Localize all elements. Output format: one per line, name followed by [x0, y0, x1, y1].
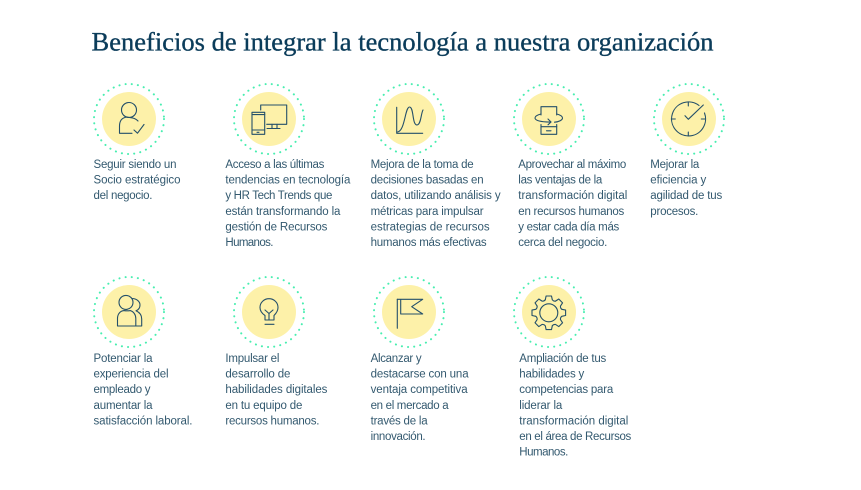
- text: benefit 6: satisfacción laboral.: [94, 415, 192, 427]
- icon: clock with check: [654, 84, 724, 154]
- text: benefit 5: procesos.: [650, 206, 698, 218]
- text: benefit 5: [650, 159, 723, 218]
- text: benefit 2: Acceso a las últimas: [225, 159, 325, 171]
- benefit 1: socio estratégico: [94, 84, 180, 202]
- benefit 5: eficiencia: [650, 84, 724, 218]
- text: benefit 6: aumentar la: [94, 400, 153, 412]
- text: benefit 9: competencias para: [519, 384, 614, 396]
- icon: light bulb: [234, 277, 304, 347]
- text: benefit 9: Humanos.: [519, 447, 568, 459]
- text: benefit 8: ventaja competitiva: [371, 384, 468, 396]
- text: benefit 7: en tu equipo de: [225, 400, 302, 412]
- text: benefit 3: métricas para impulsar: [371, 206, 484, 218]
- text: benefit 5: Mejorar la: [650, 159, 700, 171]
- text: benefit 8: en el mercado a: [371, 400, 449, 412]
- text: benefit 8: través de la: [371, 415, 428, 427]
- text: benefit 8: [371, 353, 469, 443]
- text: benefit 7: habilidades digitales: [225, 384, 328, 396]
- text: benefit 7: desarrollo de: [225, 369, 290, 381]
- text: benefit 5: agilidad de tus: [650, 190, 723, 202]
- text: benefit 1: Socio estratégico: [94, 175, 180, 187]
- icon: monitor and phone: [234, 84, 304, 154]
- text: benefit 9: habilidades y: [519, 369, 585, 381]
- benefit 6: experiencia del empleado: [94, 277, 192, 427]
- benefit 7: habilidades digitales: [225, 277, 328, 427]
- text: benefit 7: [225, 353, 328, 427]
- benefit 3: decisiones basadas en datos: [371, 84, 501, 249]
- benefit 4: transformación digital: [514, 84, 627, 249]
- text: benefit 2: y HR Tech Trends que: [225, 190, 332, 202]
- text: benefit 4: Aprovechar al máximo: [518, 159, 626, 171]
- text: benefit 4: las ventajas de la: [518, 175, 603, 187]
- text: benefit 7: Impulsar el: [225, 353, 279, 365]
- text: benefit 3: [371, 159, 501, 249]
- text: benefit 6: empleado y: [94, 384, 151, 396]
- text: benefit 3: estrategias de recursos: [371, 221, 490, 233]
- icon: line chart: [374, 84, 444, 154]
- icon: flag: [374, 277, 444, 347]
- text: benefit 3: datos, utilizando análisis y: [371, 190, 501, 202]
- text: benefit 3: decisiones basadas en: [371, 175, 484, 187]
- text: benefit 4: y estar cada día más: [518, 221, 620, 233]
- text: benefit 9: liderar la: [519, 400, 563, 412]
- text: benefit 9: [519, 353, 632, 459]
- text: benefit 8: destacarse con una: [371, 369, 469, 381]
- benefit 2: tendencias: [225, 84, 351, 249]
- text: benefit 2: [225, 159, 351, 249]
- text: benefit 1: del negocio.: [94, 190, 152, 202]
- text: benefit 4: transformación digital: [518, 190, 627, 202]
- text: benefit 8: Alcanzar y: [371, 353, 422, 365]
- text: benefit 1: [94, 159, 180, 202]
- text: benefit 9: Ampliación de tus: [519, 353, 607, 365]
- text: benefit 2: tendencias en tecnología: [225, 175, 351, 187]
- text: benefit 6: [94, 353, 192, 427]
- text: benefit 8: innovación.: [371, 431, 426, 443]
- benefit 8: ventaja competitiva: [371, 277, 469, 443]
- icon: gear: [514, 277, 584, 347]
- text: benefit 4: [518, 159, 627, 249]
- text: benefit 9: transformación digital: [519, 415, 628, 427]
- text: benefit 4: cerca del negocio.: [518, 237, 607, 249]
- text: benefit 3: humanos más efectivas: [371, 237, 487, 249]
- text: benefit 7: recursos humanos.: [225, 415, 319, 427]
- icon: rotating tablet: [514, 84, 584, 154]
- text: benefit 2: están transformando la: [225, 206, 341, 218]
- text: benefit 5: eficiencia y: [650, 175, 707, 187]
- icon: two people: [94, 277, 164, 347]
- icon: person with check: [94, 84, 164, 154]
- title: Beneficios de integrar la tecnología a nuestra organización: [92, 26, 714, 56]
- text: benefit 9: en el área de Recursos: [519, 431, 632, 443]
- text: benefit 4: en recursos humanos: [518, 206, 625, 218]
- text: benefit 3: Mejora de la toma de: [371, 159, 474, 171]
- benefit 9: competencias: [514, 277, 632, 459]
- text: benefit 2: gestión de Recursos: [225, 221, 328, 233]
- text: benefit 6: Potenciar la: [94, 353, 153, 365]
- text: benefit 1: Seguir siendo un: [94, 159, 176, 171]
- text: benefit 2: Humanos.: [225, 237, 273, 249]
- text: benefit 6: experiencia del: [94, 369, 168, 381]
